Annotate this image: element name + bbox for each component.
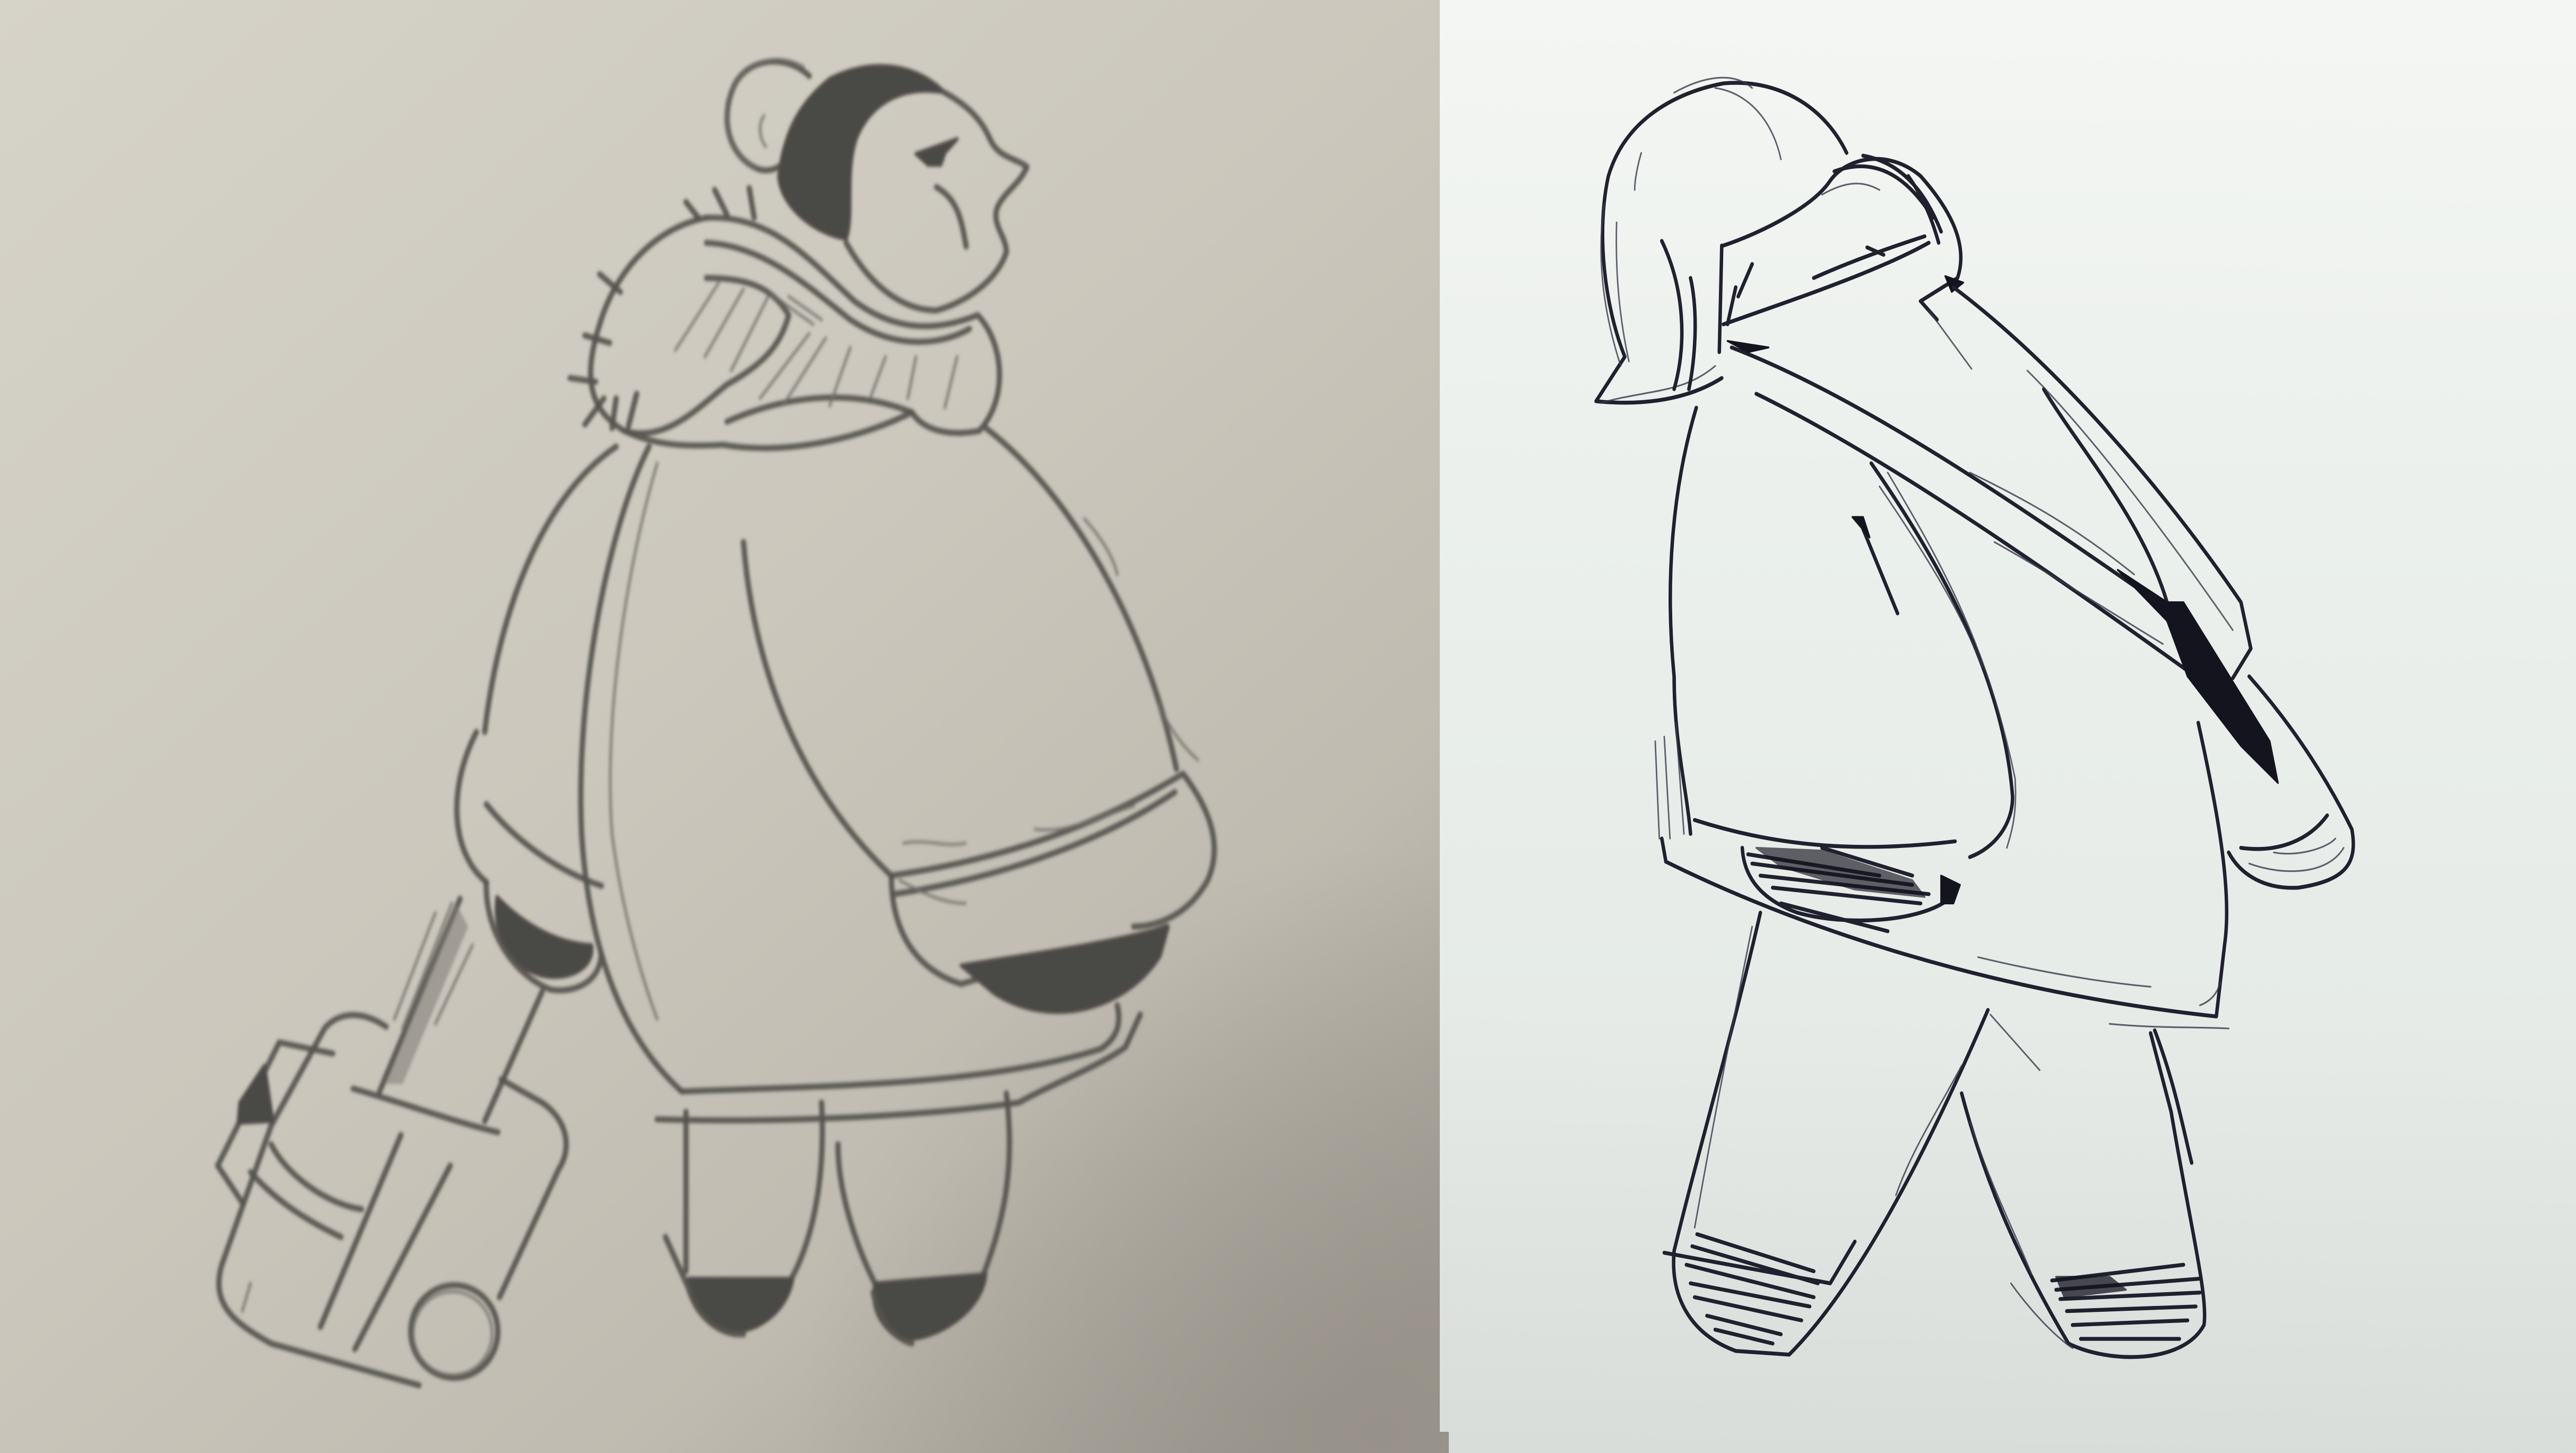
pencil: fur hood collar bbox=[570, 188, 999, 448]
pencil: right sleeve and pocket bbox=[744, 542, 1214, 984]
ink: inner arm fold bbox=[1695, 463, 2016, 857]
pencil: legs and feet bbox=[665, 1093, 1009, 1344]
ink: hand bbox=[2228, 677, 2353, 888]
ink: hood bbox=[1723, 155, 1972, 369]
ink: back and sleeve bbox=[1727, 287, 2278, 783]
pencil: hair bun bbox=[726, 59, 809, 170]
pencil: hair bbox=[779, 66, 945, 239]
figure: ink sketch of walking person bbox=[1596, 77, 2353, 1357]
ink: front leg bbox=[1664, 913, 1988, 1355]
panel: pencil sketch paper background bbox=[0, 0, 1449, 1453]
ink: hidden hand hatching bbox=[1742, 848, 1960, 931]
ink: coat body bbox=[1655, 408, 2228, 1028]
pencil: coat body bbox=[485, 428, 1198, 1092]
ink: hair bbox=[1596, 77, 1847, 403]
pencil: right hand bbox=[961, 927, 1168, 1012]
pencil: coat hem bbox=[657, 1005, 1140, 1120]
pencil: suitcase handle bbox=[353, 899, 542, 1132]
ink: rear leg bbox=[1961, 1015, 2205, 1357]
figure: pencil sketch of woman with suitcase bbox=[218, 59, 1214, 1385]
pencil: suitcase bbox=[218, 1015, 566, 1385]
pencil: left sleeve and hand bbox=[457, 732, 601, 990]
panel: ink sketch paper background bbox=[1440, 0, 2576, 1453]
pencil: face profile bbox=[846, 93, 1027, 310]
